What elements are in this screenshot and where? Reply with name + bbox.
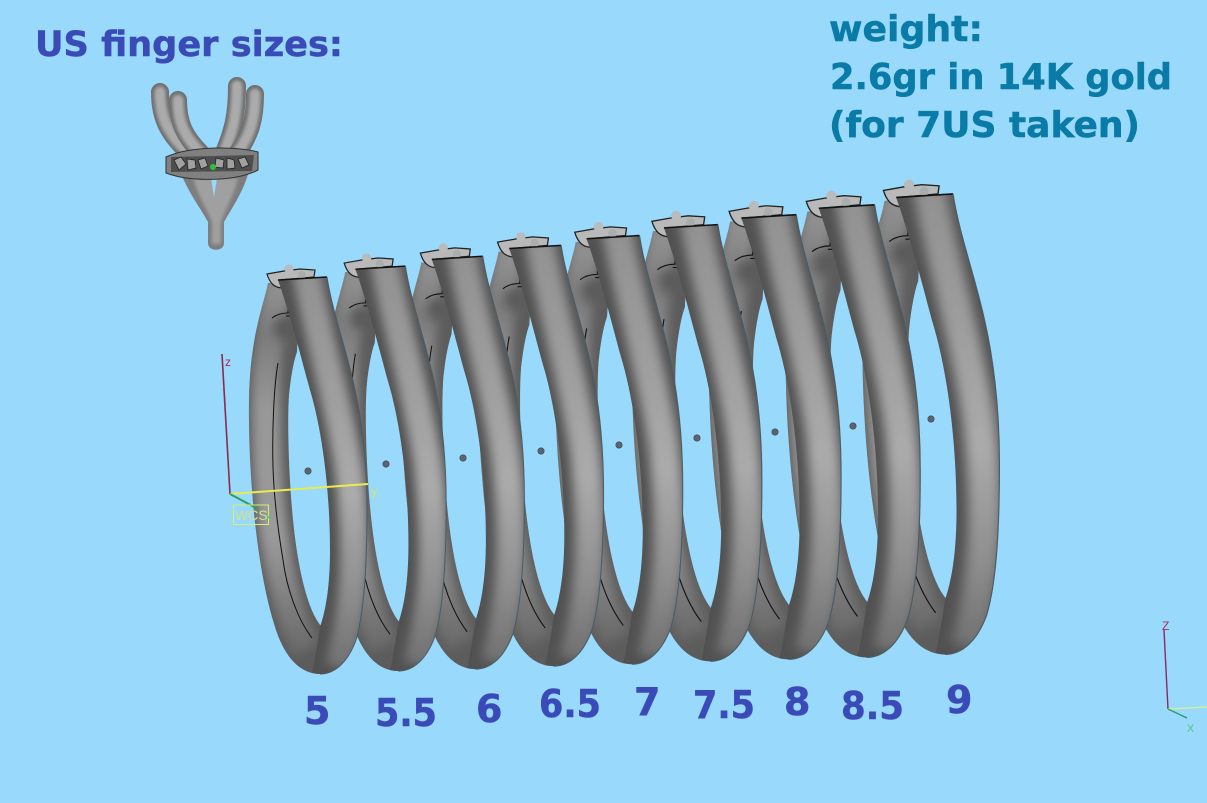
icon: green centre marker — [210, 164, 216, 170]
size labels: 8 — [784, 680, 810, 724]
weight note — [829, 9, 1172, 146]
ring size 5.5 — [326, 253, 446, 671]
icon: casting tree model — [160, 86, 258, 250]
heading: US finger sizes: US finger sizes: — [35, 25, 343, 65]
weight note: 2.6gr in 14K gold — [830, 57, 1172, 98]
ring size 5 — [249, 264, 367, 674]
size labels: 8.5 — [841, 684, 904, 728]
ring size 6.5 — [478, 232, 604, 666]
size labels: 5.5 — [375, 691, 437, 735]
ring size 7 — [555, 222, 683, 664]
ring size 8.5 — [786, 191, 920, 657]
size labels: 7 — [634, 680, 660, 724]
ring size 6 — [402, 243, 524, 669]
weight note: weight: — [829, 9, 983, 50]
axis triad: WCS: z — [225, 355, 231, 369]
axis triad: view corner: x — [1187, 719, 1194, 735]
axis triad: WCS: WCS — [235, 507, 268, 523]
ring size 9 — [862, 179, 999, 654]
ring centre points — [305, 416, 934, 474]
size labels: 7.5 — [693, 683, 755, 727]
axis triad: view corner — [1162, 619, 1207, 735]
weight note: (for 7US taken) — [829, 105, 1140, 146]
axis triad: WCS — [222, 354, 378, 524]
ring size 7.5 — [632, 211, 762, 661]
axis triad: WCS: x — [266, 512, 271, 523]
axis triad: view corner: Z — [1162, 619, 1169, 633]
size labels: 6 — [476, 687, 502, 731]
ring size 8 — [709, 201, 841, 659]
size labels: 9 — [946, 678, 972, 722]
size labels: 6.5 — [539, 682, 601, 726]
axis triad: WCS: y — [371, 484, 378, 499]
size labels: 5 — [304, 689, 330, 733]
size labels — [304, 678, 972, 735]
